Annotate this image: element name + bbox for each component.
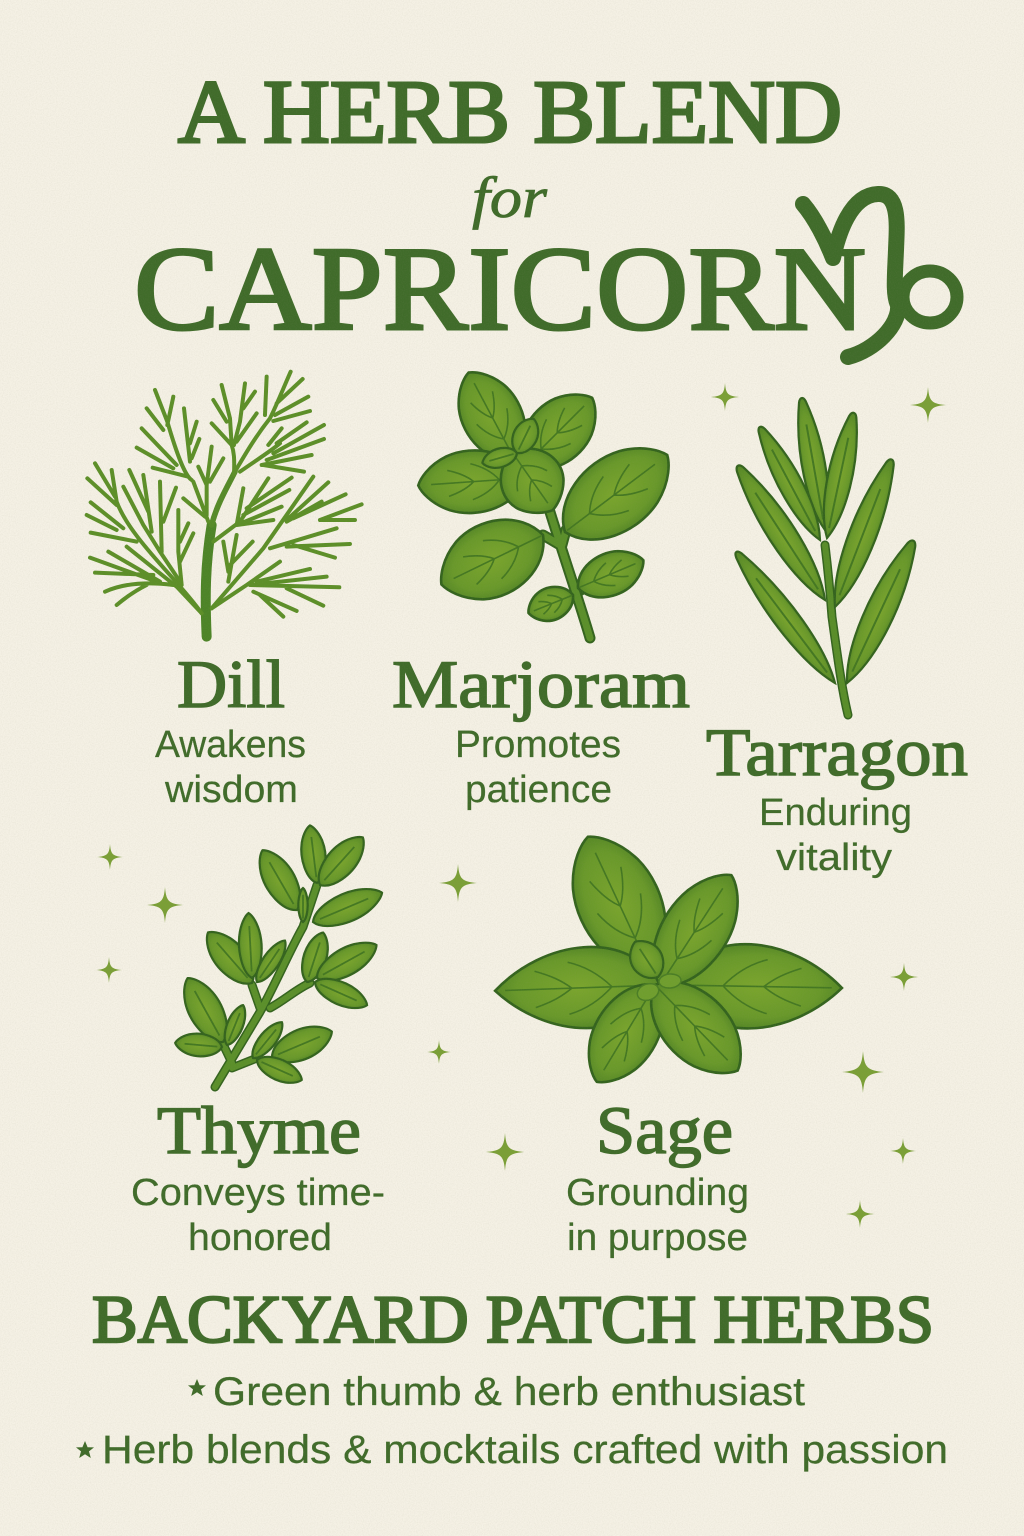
label: Thyme: Thyme — [157, 1092, 361, 1168]
icon: Capricorn glyph — [803, 194, 957, 357]
label: Tarragon — [706, 714, 968, 879]
footer bullet list: Herb blends & mocktails crafted with passion — [102, 1428, 948, 1472]
label: Tarragon: vitality — [776, 837, 892, 879]
label: Dill: Awakens — [155, 724, 306, 766]
label: Thyme: Conveys time- — [131, 1172, 385, 1214]
label: Sage — [566, 1092, 749, 1259]
label: Sage: in purpose — [567, 1217, 748, 1259]
illustration: dill — [87, 372, 362, 637]
label: Sage: Sage — [596, 1092, 733, 1168]
footer heading: BACKYARD PATCH HERBS — [92, 1281, 934, 1357]
label: Marjoram: Marjoram — [392, 646, 690, 722]
title: A HERB BLEND — [178, 63, 842, 162]
illustration: sage — [494, 819, 843, 1098]
title: CAPRICORN — [134, 222, 866, 355]
decorative sparkles — [96, 383, 946, 1228]
label: Thyme — [131, 1092, 385, 1259]
illustration: tarragon — [727, 396, 926, 715]
label: Marjoram: Promotes — [455, 724, 621, 766]
title: for — [472, 165, 547, 230]
label: Marjoram: patience — [465, 769, 612, 811]
label: Tarragon: Enduring — [759, 792, 912, 834]
label: Dill: Dill — [177, 646, 285, 722]
title — [134, 63, 866, 355]
label: Sage: Grounding — [566, 1172, 749, 1214]
label: Dill: wisdom — [164, 769, 298, 811]
label: Dill — [155, 646, 306, 811]
label: Marjoram — [392, 646, 690, 811]
illustration: marjoram — [416, 359, 689, 638]
footer bullet list — [76, 1370, 948, 1472]
label: Thyme: honored — [188, 1217, 332, 1259]
illustration: thyme — [173, 824, 388, 1089]
footer bullet list: Green thumb & herb enthusiast — [213, 1370, 805, 1414]
label: Tarragon: Tarragon — [706, 714, 968, 790]
